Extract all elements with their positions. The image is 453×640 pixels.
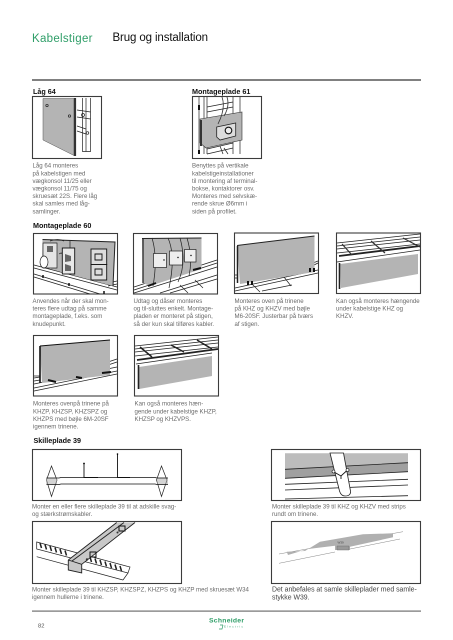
text: description [32, 503, 176, 518]
text: description: knudepunkt. [32, 321, 66, 328]
text: description: gende under kabelstige KHZP, [134, 408, 217, 415]
text: Låg 64 description: Låg 64 monteres [32, 163, 78, 170]
text: description: af stigen. [234, 321, 260, 328]
panel: plate hanging under KHZP [134, 336, 218, 423]
text: description [33, 401, 109, 430]
text: description: montageplade, f.eks. som [32, 313, 102, 320]
panel: separator with strips [272, 450, 420, 518]
panel: plate on rungs KHZP [33, 336, 118, 430]
panel: plate hanging under rungs [336, 233, 420, 320]
text: description: teres flere udtag på samme [32, 306, 107, 313]
text: Montageplade 61 description: Benyttes på vertikale [192, 163, 249, 170]
text: Låg 64 description: skruesæt 22S. Flere låg [32, 193, 97, 200]
text: description: pladen er monteret på stigen, [134, 313, 213, 320]
logo: Schneider Electric: Electric [224, 624, 244, 628]
text: description [234, 298, 313, 328]
text: Låg 64 description: vægkonsol 11/75 og [32, 186, 87, 192]
text: description: Monteres ovenpå trinene på [33, 401, 109, 408]
illustration: plate above ladder [234, 233, 318, 294]
illustration: W39 joint piece: W39 [338, 540, 344, 544]
text: description line 2: stykke W39. [272, 594, 310, 601]
text: Montageplade 61 description: kabelstigeinstallationer [192, 170, 254, 177]
text: description [134, 298, 214, 328]
text: description: under kabelstige KHZ og [336, 306, 403, 313]
illustration: plate below ladder [336, 233, 420, 294]
text: description: KHZSP og KHZVPS. [134, 416, 191, 423]
page title: Brug og installation [112, 32, 208, 44]
text: Montageplade 61 description: bokse, kontaktorer osv. [192, 186, 255, 192]
text: Montageplade 61 description: Monteres med selvskæ- [192, 193, 257, 200]
text: description: Anvendes når der skal mon- [32, 298, 109, 305]
illustration: separator on perforated rung [32, 522, 182, 584]
text: description: KHZV. [336, 313, 354, 320]
text: description [134, 401, 217, 423]
text: Låg 64 description: skal samles med låg- [32, 201, 90, 208]
illustration: Montageplade 61 on vertical ladder [192, 96, 262, 158]
text: description: Kan også monteres hængende [336, 298, 420, 305]
text: description: igennem hullerne i trinene. [32, 594, 104, 601]
text: description: Monter en eller flere skilleplade 39 til at adskille svag- [32, 503, 176, 510]
text: Montageplade 61 description: rende skrue Ø6mm i [192, 201, 247, 208]
panel: sockets on plate [32, 234, 118, 328]
panel: joining separator plates [272, 522, 420, 601]
text: description: M6-20SF. Justerbar på tværs [234, 313, 313, 320]
text: description: Monter skilleplade 39 til KHZSP, KHZSPZ, KHZPS og KHZP med skruesæt W34 [32, 586, 249, 593]
illustration: cable tie around rung [272, 450, 420, 500]
illustration: boxes on mounting plate [134, 234, 218, 294]
text: Låg 64 description: samlinger. [32, 208, 61, 215]
illustration: plate above perforated ladder [34, 336, 118, 396]
text: Montageplade 61 description [192, 163, 257, 215]
text: Montageplade 61 description: til montering af terminal- [192, 178, 257, 185]
text: Låg 64 description: vægkonsol 11/25 eller [32, 178, 92, 185]
logo: Schneider Electric [209, 618, 244, 629]
text: description: KHZPS med bøjle 6M-20SF [33, 416, 109, 423]
illustration: cross-section with dividers [32, 450, 182, 500]
panel: separator screwed to perforated rungs [32, 522, 249, 601]
text: description: Udtag og dåser monteres [134, 298, 202, 305]
section label: Kabelstiger: Kabelstiger [32, 33, 93, 45]
text: description: på KHZ og KHZV med bøjle [234, 306, 311, 313]
text: description: Monteres oven på trinene [234, 298, 304, 305]
page number: 82 [38, 624, 44, 630]
text: description [32, 586, 249, 601]
panel: plate on top of rungs [234, 233, 318, 328]
text: description: Kan også monteres hæn- [134, 401, 203, 408]
illustration: W39 joint piece [272, 522, 420, 584]
panel: separator cross-section [32, 450, 182, 518]
text: description [32, 298, 109, 328]
heading: Skilleplade 39: Skilleplade 39 [34, 436, 81, 445]
text: description: rundt om trinene. [272, 511, 318, 518]
text: description: igennem trinene. [33, 424, 79, 430]
text: description [272, 503, 406, 518]
illustration: sockets on mounting plate [34, 234, 118, 294]
text: description [336, 298, 420, 320]
panel: outlets and boxes on plate [134, 234, 218, 328]
heading: Montageplade 60: Montageplade 60 [33, 221, 91, 230]
illustration: plate below perforated ladder [134, 336, 218, 396]
text: description: så der kun skal tilføres kabler. [134, 321, 214, 328]
text: description: Monter skilleplade 39 til KHZ og KHZV med strips [272, 503, 406, 510]
text: Låg 64 description [32, 163, 97, 215]
heading: Montageplade 61: Montageplade 61 [192, 87, 250, 96]
text: description: Det anbefales at samle skilleplader med samle- [272, 586, 417, 594]
text: description: og til-sluttes enkelt. Montage- [134, 306, 213, 313]
panel: Låg 64 [32, 87, 102, 215]
text: Montageplade 61 description: siden på profilet. [192, 208, 237, 215]
illustration: Låg 64 lid on ladder [32, 96, 102, 158]
text: Låg 64 description: på kabelstigen med [32, 170, 85, 177]
text: description: KHZP, KHZSP, KHZSPZ og [33, 408, 107, 415]
text: description: og stærkstrømskabler. [32, 511, 93, 518]
logo: Schneider Electric: Schneider [209, 618, 244, 624]
heading: Låg 64: Låg 64 [33, 87, 56, 96]
panel: Montageplade 61 [192, 87, 262, 215]
